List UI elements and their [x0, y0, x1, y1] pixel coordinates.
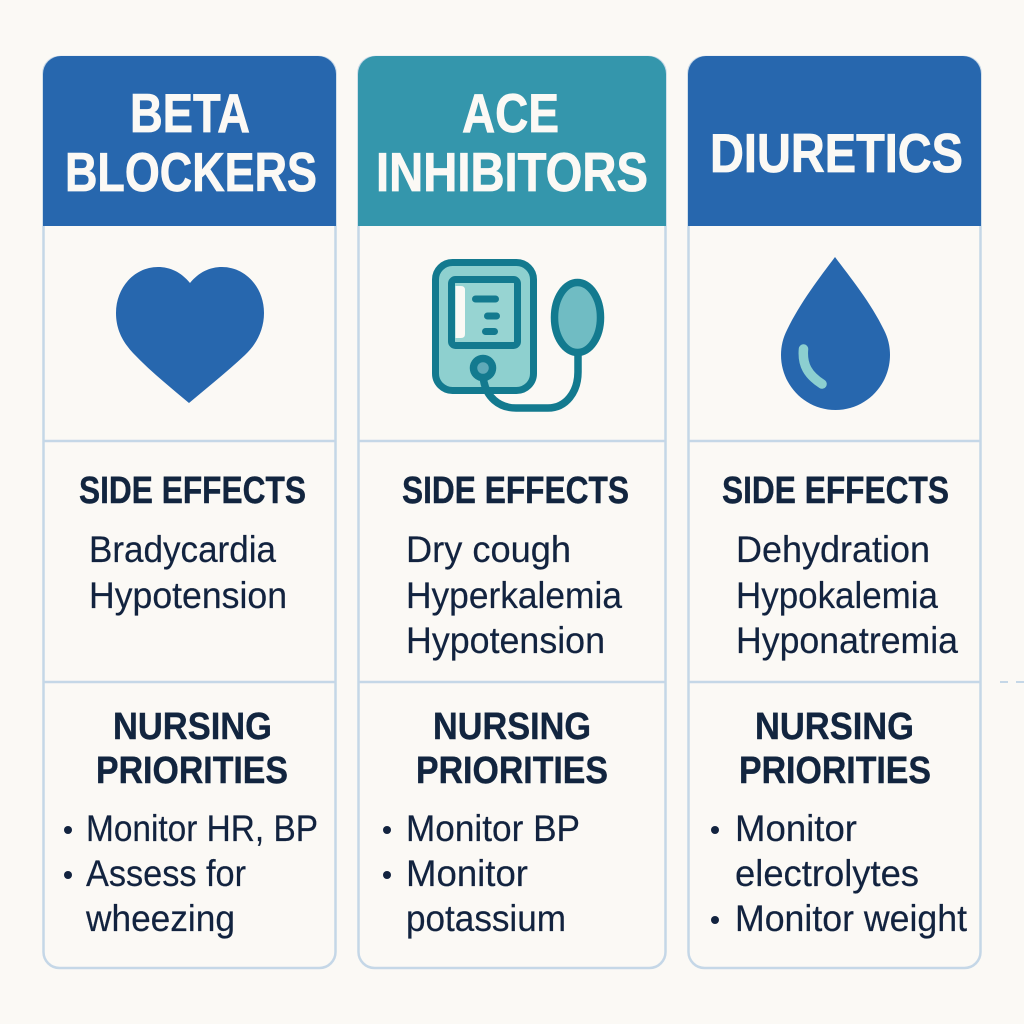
- side effects: ace inhibitors: SIDE EFFECTS: [402, 470, 629, 512]
- side effects: ace inhibitors: Dry cough: [406, 529, 571, 570]
- side effects: diuretics: [722, 470, 958, 661]
- side effects: beta blockers: Bradycardia: [89, 529, 276, 570]
- header: ace inhibitors: ACE: [462, 82, 559, 144]
- panel: beta blockers: [43, 56, 336, 968]
- nursing priorities: beta blockers: [64, 706, 318, 939]
- side effects: diuretics: Hyponatremia: [736, 620, 958, 661]
- nursing priorities: diuretics: PRIORITIES: [739, 750, 931, 792]
- side effects: diuretics: SIDE EFFECTS: [722, 470, 949, 512]
- icon: heart: [116, 267, 264, 403]
- header: beta blockers: BLOCKERS: [65, 141, 317, 203]
- nursing priorities: ace inhibitors: potassium: [406, 898, 566, 939]
- header: diuretics: DIURETICS: [710, 122, 963, 184]
- nursing priorities: ace inhibitors: Monitor: [406, 853, 528, 894]
- nursing priorities: diuretics: [711, 706, 968, 939]
- header: beta blockers: BETA: [130, 82, 250, 144]
- nursing priorities: diuretics: Monitor: [735, 808, 857, 849]
- nursing priorities: ace inhibitors: NURSING: [433, 706, 591, 748]
- nursing priorities: ace inhibitors: PRIORITIES: [416, 750, 608, 792]
- nursing priorities: diuretics: NURSING: [755, 706, 914, 748]
- nursing priorities: beta blockers: wheezing: [85, 898, 235, 939]
- panel: diuretics: [688, 56, 981, 968]
- side effects: beta blockers: [79, 470, 306, 616]
- side effects: ace inhibitors: [402, 470, 629, 661]
- header: ace inhibitors: INHIBITORS: [376, 141, 648, 203]
- nursing priorities: ace inhibitors: Monitor BP: [406, 808, 580, 849]
- panel: ace inhibitors: [358, 56, 666, 968]
- nursing priorities: beta blockers: Monitor HR, BP: [86, 808, 318, 849]
- header: beta blockers: [43, 56, 336, 226]
- icon: water drop: [781, 257, 890, 410]
- side effects: ace inhibitors: Hypotension: [406, 620, 605, 661]
- side effects: diuretics: Hypokalemia: [736, 575, 938, 616]
- header: diuretics: [688, 56, 981, 226]
- side effects: ace inhibitors: Hyperkalemia: [406, 575, 622, 616]
- nursing priorities: ace inhibitors: [383, 706, 608, 939]
- nursing priorities: beta blockers: NURSING: [113, 706, 272, 748]
- nursing priorities: beta blockers: PRIORITIES: [96, 750, 288, 792]
- header: ace inhibitors: [358, 56, 666, 226]
- nursing priorities: beta blockers: Assess for: [86, 853, 246, 894]
- side effects: beta blockers: Hypotension: [89, 575, 287, 616]
- nursing priorities: diuretics: electrolytes: [735, 853, 919, 894]
- side effects: beta blockers: SIDE EFFECTS: [79, 470, 306, 512]
- side effects: diuretics: Dehydration: [736, 529, 930, 570]
- icon: blood pressure monitor: [436, 262, 600, 408]
- nursing priorities: diuretics: Monitor weight: [735, 898, 968, 939]
